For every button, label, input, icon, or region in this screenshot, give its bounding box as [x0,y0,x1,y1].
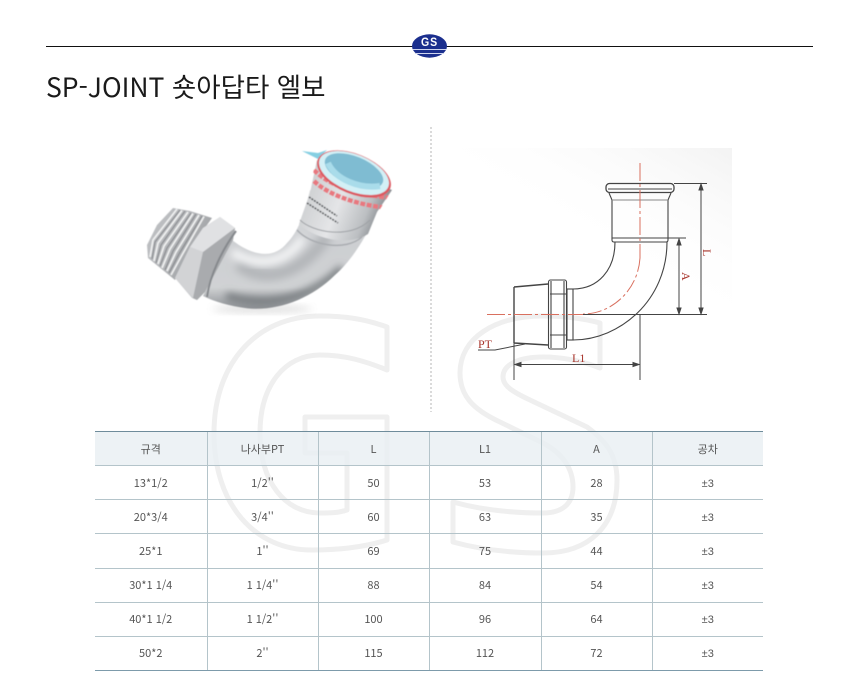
spec table: 2'' [256,645,269,661]
spec table: ±3 [702,546,714,558]
panel: technical drawing [478,148,732,380]
spec table: 1 1/2'' [247,611,278,627]
spec table: 72 [590,645,603,661]
spec table: 63 [479,509,491,525]
divider: dotted vertical [430,127,432,412]
spec table [95,431,763,671]
spec table: 50 [367,475,380,491]
spec table: 88 [367,577,380,593]
centerlines [487,163,640,314]
spec table: 35 [590,509,603,525]
spec table: A [593,441,600,457]
spec table: 69 [367,543,380,559]
dimension labels: L1 [572,351,585,365]
spec table: 40*1 1/2 [129,611,172,627]
socket opening: blue liner and red rim [302,141,398,207]
ground shadow [212,305,312,313]
spec table: 20*3/4 [134,509,168,525]
spec table: ±3 [702,512,714,524]
spec table: 60 [367,509,380,525]
spec table: 1 1/4'' [247,577,278,593]
spec table: 28 [590,475,603,491]
hex nut [175,217,236,300]
stamped marking text [307,197,338,223]
spec table: 50*2 [139,645,162,661]
elbow outline [514,184,674,349]
dimension lines [478,184,707,380]
spec table: 100 [364,611,383,627]
spec table: 96 [479,611,491,627]
spec table: 나사부PT [241,441,284,457]
icon: GS logo: GS [421,35,438,49]
dimension labels [478,249,714,365]
dimension labels: L [700,249,714,256]
red printed bands [314,170,392,208]
spec table: ±3 [702,648,714,660]
spec table: 25*1 [139,543,162,559]
icon: GS logo [412,34,447,58]
spec table: 44 [590,543,603,559]
spec table: 1'' [256,543,269,559]
spec table: 54 [590,577,603,593]
spec table: ±3 [702,478,714,490]
panel: product photo of elbow fitting [146,150,392,315]
header rule with GS logo [46,34,813,58]
spec table: 3/4'' [251,509,274,525]
socket body [297,160,392,245]
spec table: 64 [590,611,603,627]
spec table: 13*1/2 [134,475,168,491]
male thread [147,208,212,280]
spec table: 53 [479,475,491,491]
spec table: ±3 [702,614,714,626]
spec table: ±3 [702,580,714,592]
spec table: 75 [479,543,491,559]
spec table: 30*1 1/4 [129,577,172,593]
title: SP-JOINT 숏아답타 엘보 [46,66,326,105]
spec table: 112 [476,645,494,661]
spec table: 공차 [698,441,718,457]
spec table: 84 [479,577,491,593]
curved pipe [203,190,377,309]
dimension labels: PT [478,337,493,351]
spec table: L1 [479,441,491,457]
spec table: 1/2'' [251,475,274,491]
spec table: 규격 [141,441,161,457]
spec table: 115 [364,645,383,661]
dimension labels: A [679,272,693,281]
spec table: L [370,441,376,457]
